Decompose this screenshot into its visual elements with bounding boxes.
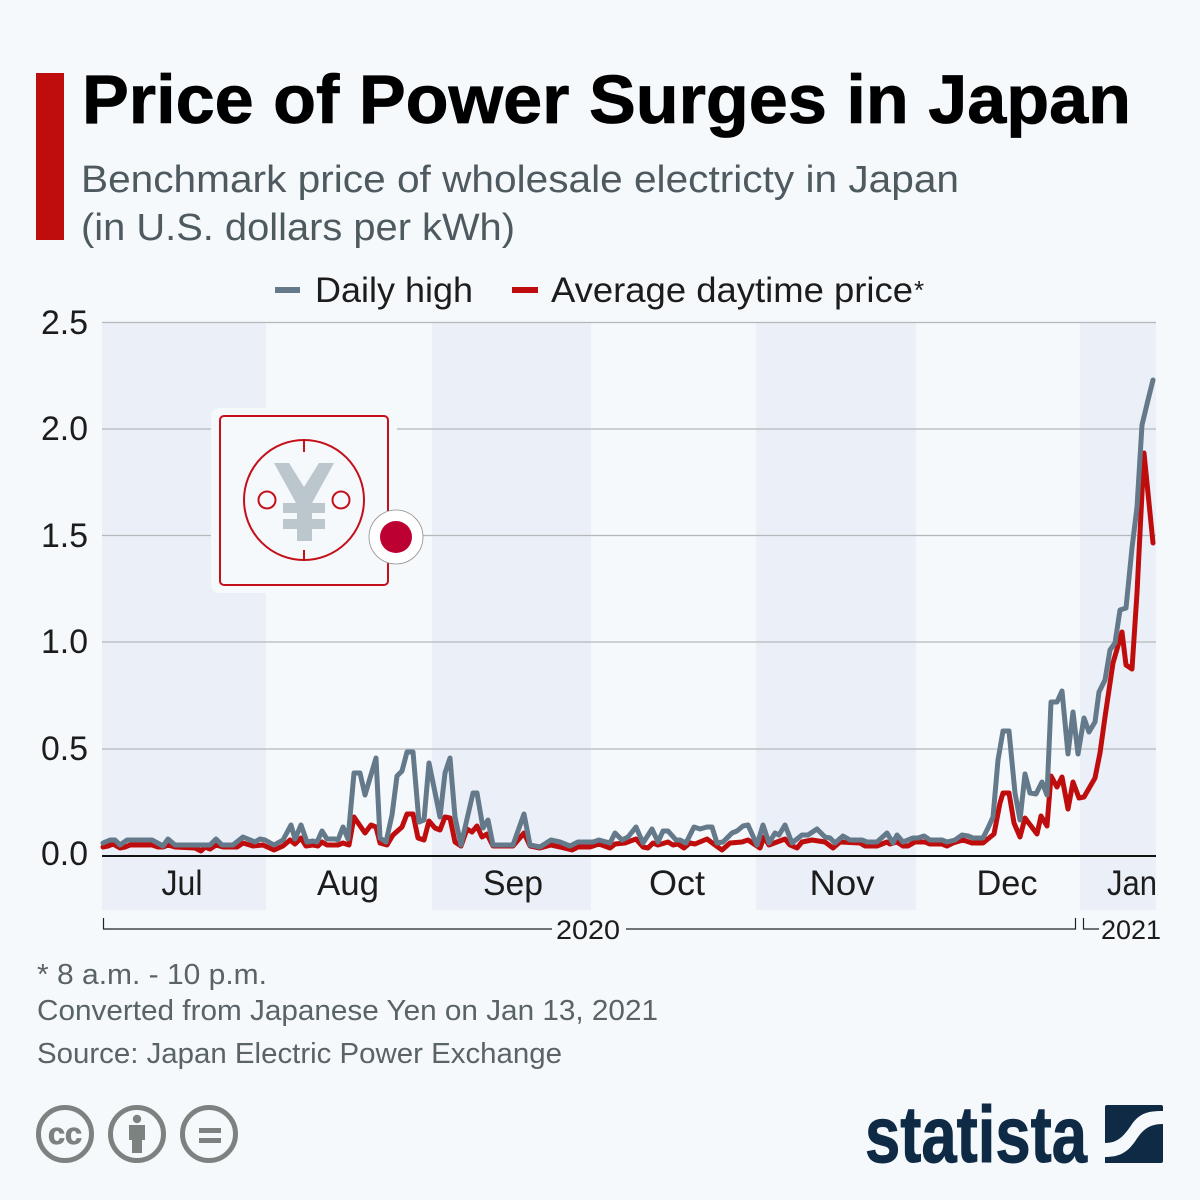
legend: * bbox=[914, 275, 924, 305]
x axis month labels: Aug bbox=[317, 864, 379, 903]
x axis month labels: Oct bbox=[649, 864, 705, 903]
x axis month labels: Jan bbox=[1107, 864, 1157, 903]
year bracket 2021: 2021 bbox=[1101, 915, 1161, 945]
grid lines bbox=[102, 322, 1156, 749]
icon: attribution bbox=[110, 1108, 164, 1160]
statista logo mark bbox=[1105, 1105, 1163, 1163]
y axis labels: 0.5 bbox=[41, 730, 88, 768]
footnotes: Source: Japan Electric Power Exchange bbox=[37, 1038, 562, 1070]
month bands bbox=[102, 322, 1156, 910]
line: average daytime price bbox=[103, 453, 1153, 851]
accent bar bbox=[36, 73, 64, 240]
x axis month labels: Sep bbox=[483, 864, 543, 903]
y axis labels bbox=[41, 304, 88, 873]
footnotes: * 8 a.m. - 10 p.m. bbox=[37, 959, 267, 991]
y axis labels: 0.0 bbox=[41, 835, 88, 873]
legend: Daily high bbox=[315, 271, 473, 310]
year bracket 2020: 2020 bbox=[556, 915, 620, 945]
icon: creative commons: cc bbox=[48, 1116, 82, 1151]
icon: no derivatives bbox=[182, 1108, 236, 1160]
legend: Average daytime price bbox=[551, 271, 913, 310]
footnotes bbox=[37, 959, 658, 1070]
y axis labels: 2.5 bbox=[41, 304, 88, 342]
year bracket 2020 bbox=[104, 915, 1076, 945]
y axis labels: 2.0 bbox=[41, 410, 88, 448]
statista wordmark: statista bbox=[865, 1090, 1087, 1179]
x axis month labels bbox=[162, 864, 1157, 903]
x axis month labels: Dec bbox=[976, 864, 1038, 903]
x axis month labels: Jul bbox=[162, 864, 202, 903]
icon: creative commons bbox=[38, 1108, 92, 1160]
subtitle: Benchmark price of wholesale electricty in Japan bbox=[81, 159, 959, 201]
title: Price of Power Surges in Japan bbox=[82, 61, 1131, 138]
legend bbox=[275, 271, 924, 310]
line: daily high bbox=[103, 380, 1153, 847]
icon: yen power socket with Japan flag bbox=[211, 408, 423, 593]
x axis line bbox=[102, 855, 1156, 857]
y axis labels: 1.0 bbox=[41, 623, 88, 661]
x axis month labels: Nov bbox=[810, 864, 875, 903]
subtitle: (in U.S. dollars per kWh) bbox=[81, 207, 515, 249]
footnotes: Converted from Japanese Yen on Jan 13, 2021 bbox=[37, 995, 658, 1027]
subtitle bbox=[81, 159, 959, 249]
y axis labels: 1.5 bbox=[41, 517, 88, 555]
